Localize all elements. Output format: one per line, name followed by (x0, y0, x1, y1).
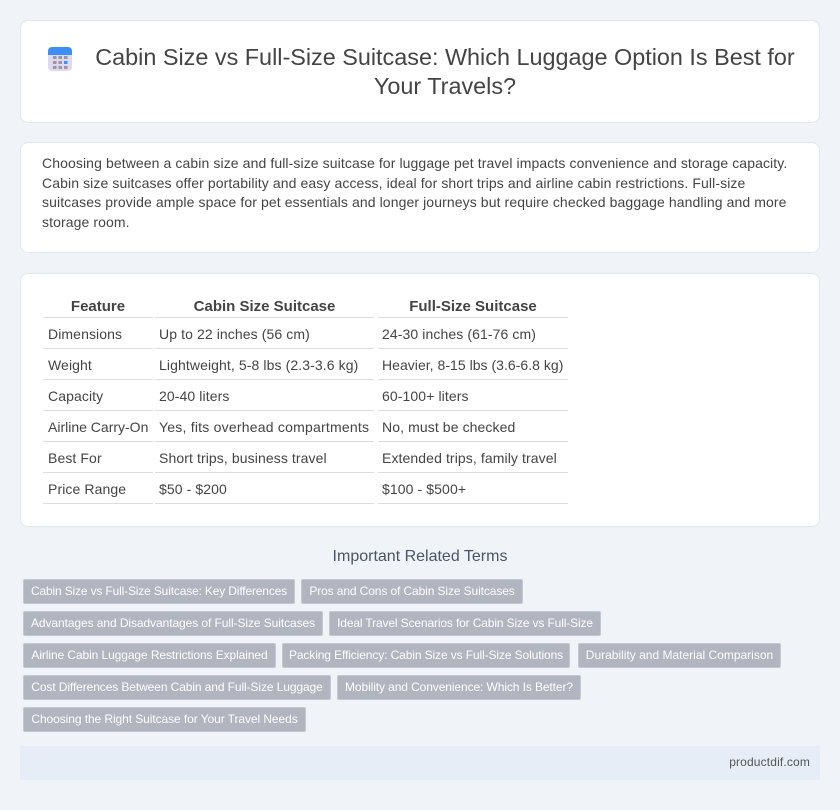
comparison table: Yes, fits overhead compartments (159, 419, 369, 435)
comparison table: $50 - $200 (159, 481, 227, 497)
header panel (20, 20, 820, 123)
comparison table: Up to 22 inches (56 cm) (159, 326, 310, 342)
comparison table (43, 298, 568, 504)
related term tags: Choosing the Right Suitcase for Your Travel Needs (31, 712, 298, 726)
comparison table: No, must be checked (382, 419, 515, 435)
related term tags: Airline Cabin Luggage Restrictions Explained (31, 648, 268, 662)
footer bar (20, 746, 820, 780)
comparison table: 20-40 liters (159, 388, 229, 404)
related term tags: Mobility and Convenience: Which Is Better? (345, 680, 573, 694)
intro paragraph: storage room. (42, 214, 130, 230)
comparison table: Lightweight, 5-8 lbs (2.3-3.6 kg) (159, 357, 358, 373)
comparison table: Airline Carry-On (48, 419, 148, 435)
comparison table: Dimensions (48, 326, 122, 342)
related term tags: Durability and Material Comparison (586, 648, 773, 662)
title: Cabin Size vs Full-Size Suitcase: Which Luggage Option Is Best for Your Travels? (95, 44, 795, 99)
comparison table: Cabin Size Suitcase (194, 298, 335, 315)
intro paragraph: suitcases provide ample space for pet essentials and longer journeys but require checked baggage handling and more (42, 194, 787, 210)
comparison table: 24-30 inches (61-76 cm) (382, 326, 536, 342)
intro paragraph (42, 155, 787, 230)
related term tags: Cabin Size vs Full-Size Suitcase: Key Differences (31, 584, 287, 598)
comparison table: 60-100+ liters (382, 388, 469, 404)
intro paragraph: Cabin size suitcases offer portability and easy access, ideal for short trips and airline cabin restrictions. Full-size (42, 175, 745, 191)
comparison table: Full-Size Suitcase (409, 298, 537, 315)
comparison table: Short trips, business travel (159, 450, 327, 466)
related term tags (23, 579, 781, 732)
comparison table: Best For (48, 450, 102, 466)
comparison table: Feature (71, 298, 125, 315)
related terms heading: Important Related Terms (333, 548, 507, 565)
intro paragraph: Choosing between a cabin size and full-size suitcase for luggage pet travel impacts convenience and storage capacity. (42, 155, 787, 171)
footer source text: productdif.com (729, 755, 810, 769)
related term tags: Cost Differences Between Cabin and Full-Size Luggage (31, 680, 323, 694)
related term tags: Packing Efficiency: Cabin Size vs Full-Size Solutions (289, 648, 563, 662)
related term tags: Advantages and Disadvantages of Full-Size Suitcases (31, 616, 315, 630)
comparison table panel (20, 273, 820, 527)
comparison table: $100 - $500+ (382, 481, 466, 497)
icon: calendar (48, 47, 72, 71)
comparison table: Extended trips, family travel (382, 450, 557, 466)
comparison table: Heavier, 8-15 lbs (3.6-6.8 kg) (382, 357, 563, 373)
comparison table: Weight (48, 357, 92, 373)
related term tags: Pros and Cons of Cabin Size Suitcases (309, 584, 515, 598)
comparison table: Capacity (48, 388, 103, 404)
comparison table: Price Range (48, 481, 126, 497)
intro text panel (20, 142, 820, 253)
related term tags: Ideal Travel Scenarios for Cabin Size vs Full-Size (337, 616, 593, 630)
